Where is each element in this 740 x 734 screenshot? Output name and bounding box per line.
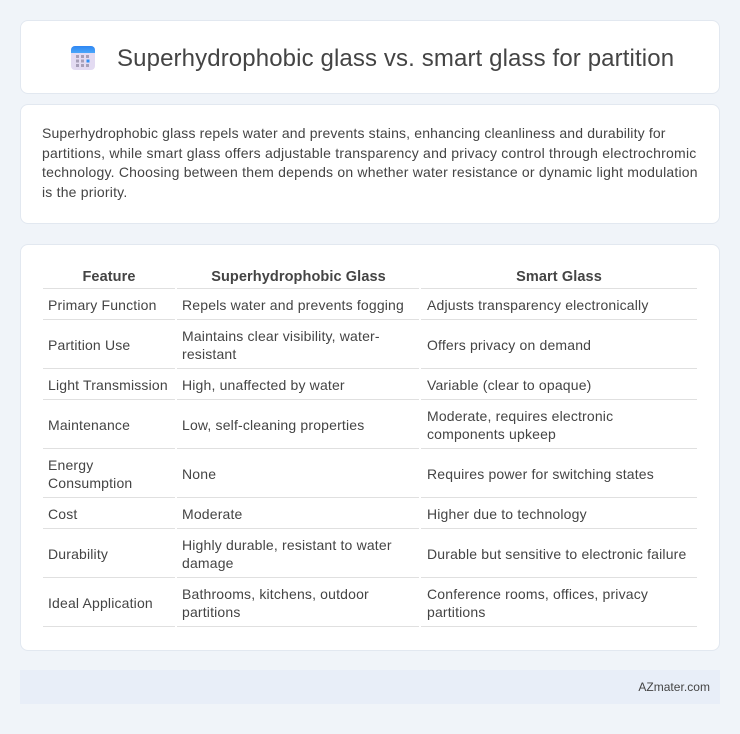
table header: Feature: [82, 269, 136, 285]
table header: [82, 269, 602, 285]
row: ideal application: Conference rooms, offices, privacy: [427, 586, 648, 602]
row: light transmission: Light Transmission: [48, 377, 168, 393]
intro text: [42, 125, 698, 200]
row: light transmission: [48, 377, 591, 393]
intro text: is the priority.: [42, 184, 127, 200]
row: partition use: Offers privacy on demand: [427, 337, 591, 353]
row: maintenance: components upkeep: [427, 426, 556, 442]
intro text: partitions, while smart glass offers adjustable transparency and privacy control through electrochromic: [42, 145, 697, 161]
row: cost: Higher due to technology: [427, 506, 587, 522]
row: energy consumption: Consumption: [48, 475, 132, 491]
row: partition use: Maintains clear visibility, water-: [182, 328, 380, 344]
row: maintenance: Maintenance: [48, 417, 130, 433]
row: durability: [48, 537, 686, 571]
comparison table: [43, 269, 697, 627]
row: energy consumption: Requires power for switching states: [427, 466, 654, 482]
row: cost: [48, 506, 587, 522]
row: primary function: Primary Function: [48, 297, 157, 313]
title: Superhydrophobic glass vs. smart glass for partition: [117, 45, 674, 72]
row: durability: Durable but sensitive to electronic failure: [427, 546, 686, 562]
row: durability: Durability: [48, 546, 108, 562]
row: durability: Highly durable, resistant to water: [182, 537, 392, 553]
row: light transmission: High, unaffected by water: [182, 377, 345, 393]
row: partition use: [48, 328, 591, 362]
row: cost: Moderate: [182, 506, 243, 522]
intro text panel: [20, 104, 720, 224]
table header: Superhydrophobic Glass: [211, 269, 386, 285]
table header: Smart Glass: [516, 269, 602, 285]
row: ideal application: partitions: [427, 604, 486, 620]
row: cost: Cost: [48, 506, 77, 522]
row: maintenance: Moderate, requires electronic: [427, 408, 613, 424]
row: partition use: Partition Use: [48, 337, 130, 353]
row: partition use: resistant: [182, 346, 236, 362]
row: ideal application: Bathrooms, kitchens, outdoor: [182, 586, 369, 602]
row: ideal application: [48, 586, 648, 620]
row: light transmission: Variable (clear to opaque): [427, 377, 591, 393]
row: primary function: [48, 297, 648, 313]
footer bar: [20, 670, 720, 704]
row: durability: damage: [182, 555, 234, 571]
row: ideal application: partitions: [182, 604, 241, 620]
row: primary function: Repels water and prevents fogging: [182, 297, 404, 313]
icon: calendar: [71, 46, 95, 70]
row: energy consumption: Energy: [48, 457, 93, 473]
footer credit: AZmater.com: [638, 680, 710, 694]
row: ideal application: Ideal Application: [48, 595, 153, 611]
row: energy consumption: [48, 457, 654, 491]
row: primary function: Adjusts transparency electronically: [427, 297, 648, 313]
row: maintenance: [48, 408, 613, 442]
comparison table panel: [20, 244, 720, 651]
row: energy consumption: None: [182, 466, 216, 482]
intro text: technology. Choosing between them depends on whether water resistance or dynamic light modulation: [42, 164, 698, 180]
intro text: Superhydrophobic glass repels water and prevents stains, enhancing cleanliness and durability for: [42, 125, 666, 141]
row: maintenance: Low, self-cleaning properties: [182, 417, 364, 433]
header panel: [20, 20, 720, 94]
